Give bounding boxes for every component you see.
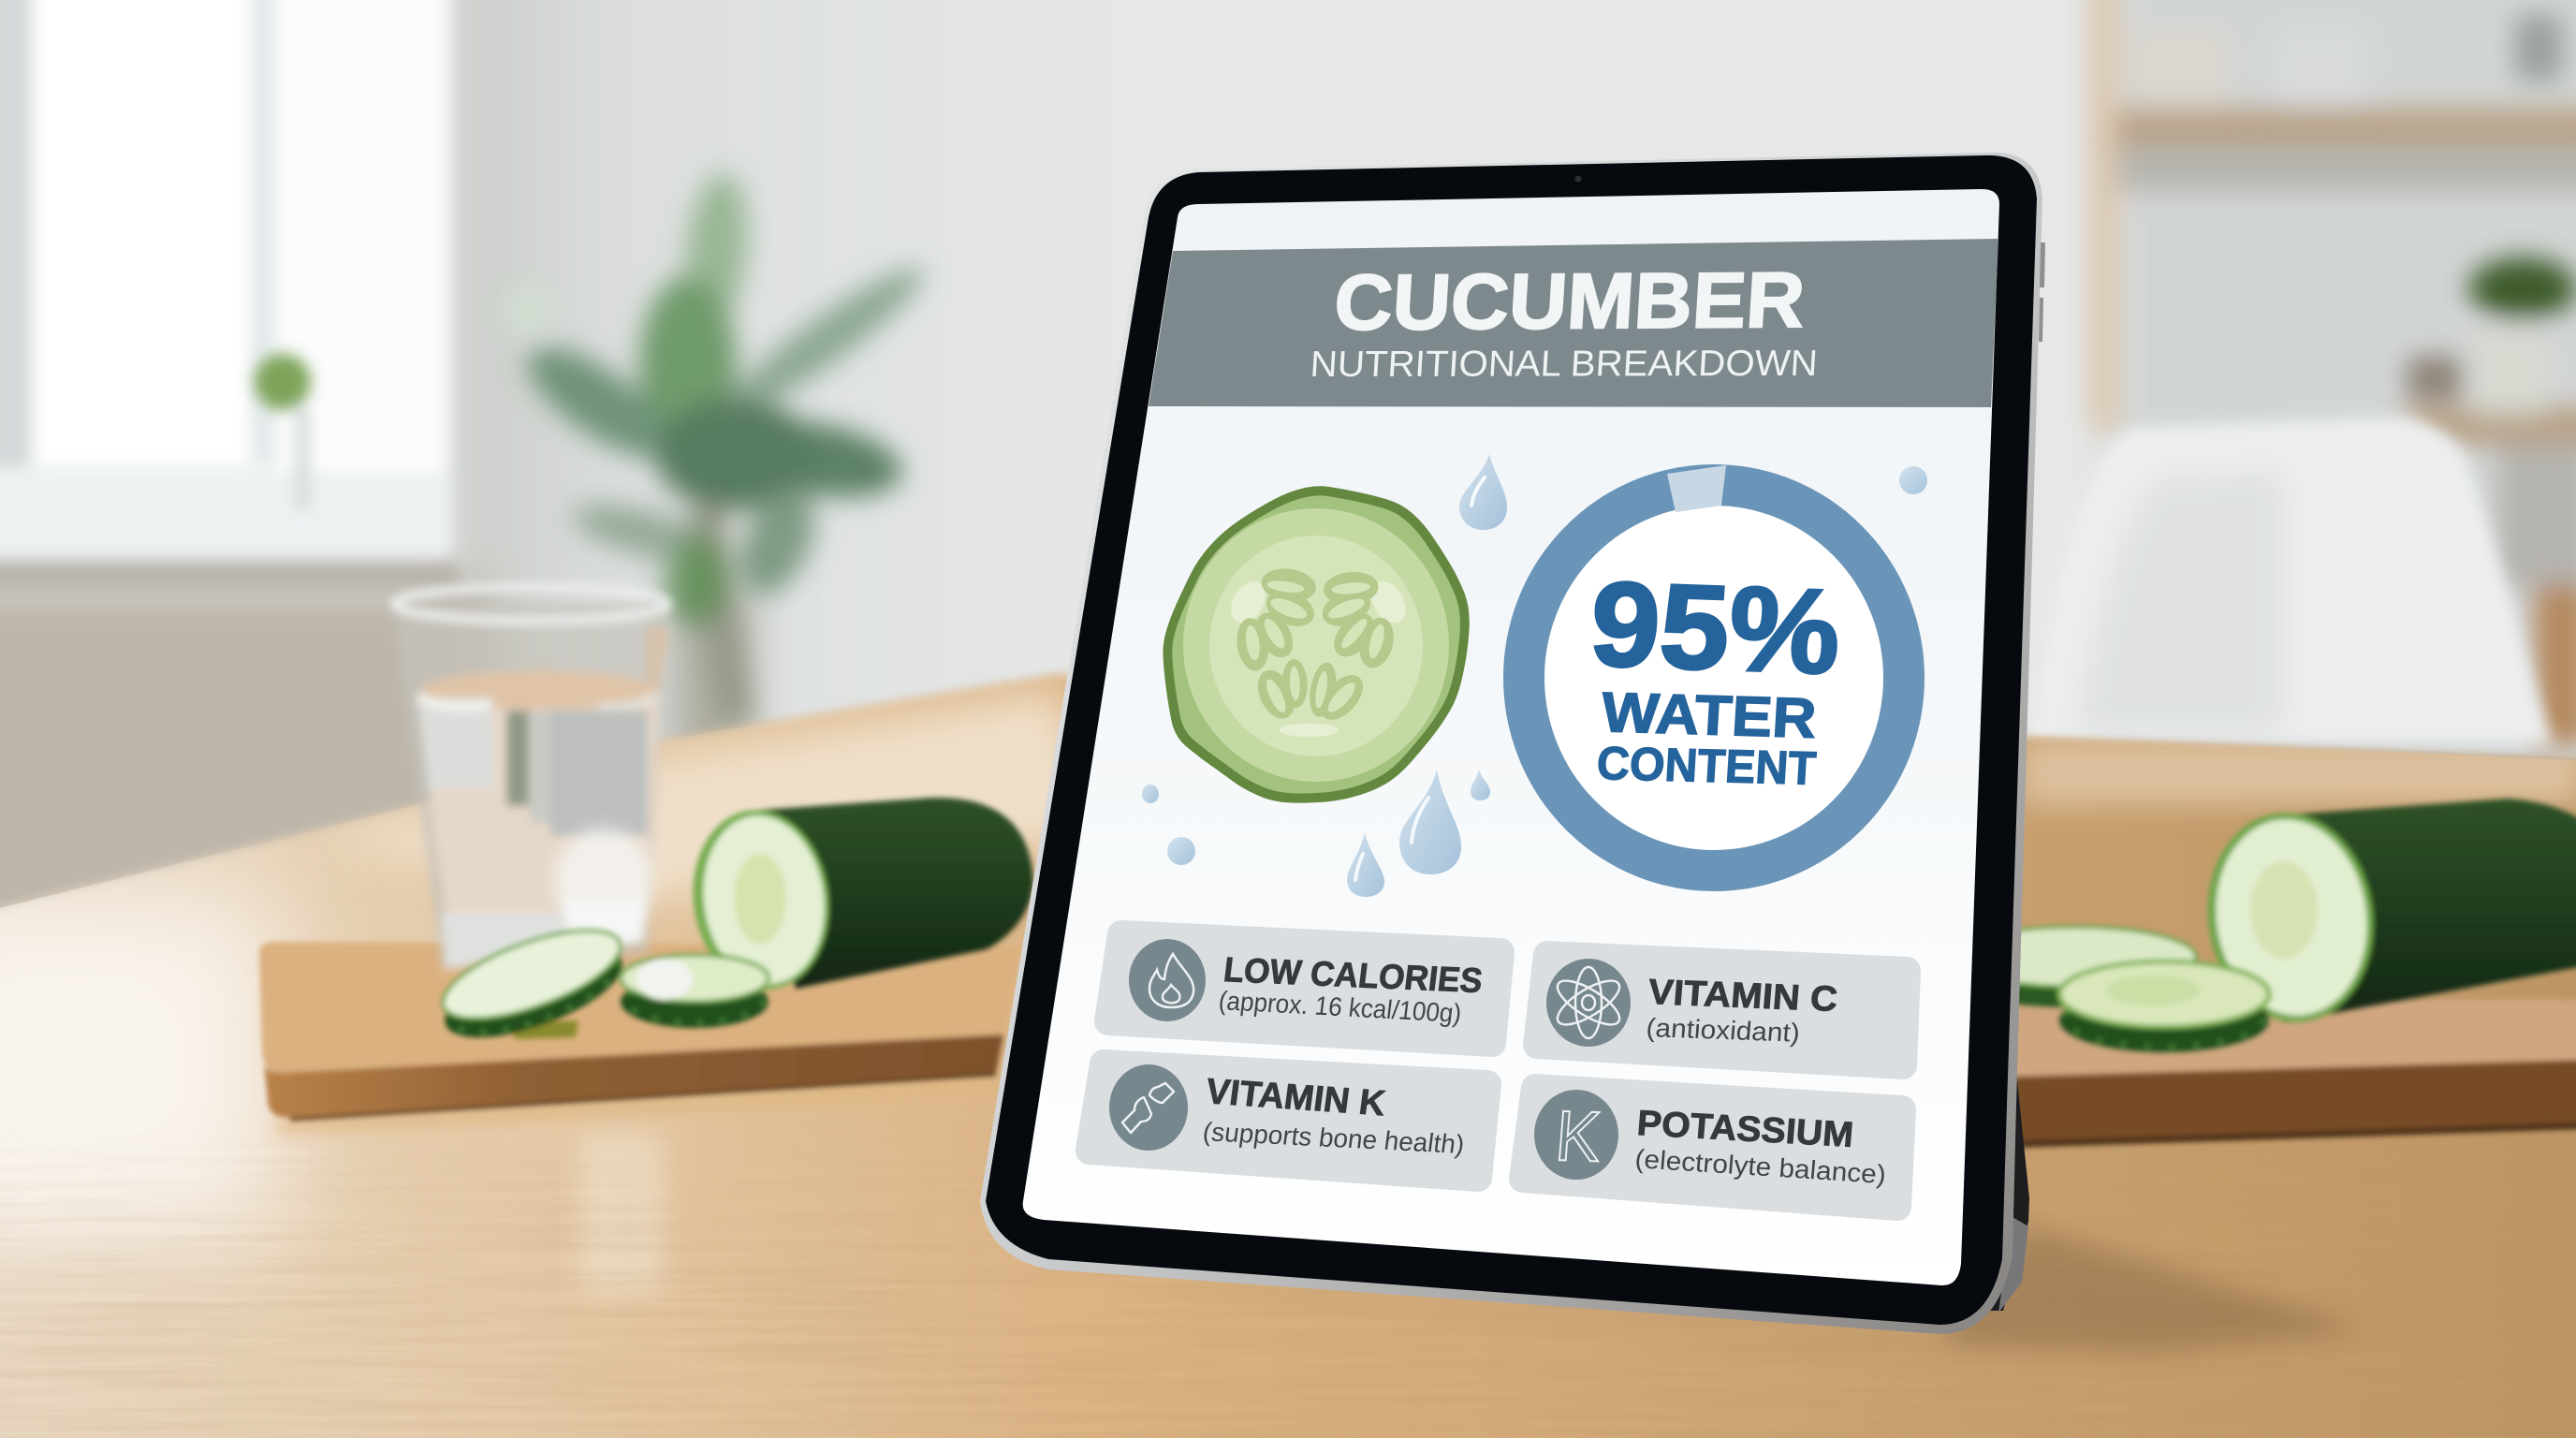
water droplets: [1142, 454, 1927, 897]
title: CUCUMBER: [1332, 256, 1808, 346]
window with sill: [0, 0, 459, 592]
tablet black bezel: [986, 155, 2037, 1325]
blurred potted plant: [505, 170, 935, 721]
cucumber slice illustration: [1163, 486, 1470, 803]
heading: VITAMIN C: [1647, 973, 1839, 1020]
blurred white chair: [2030, 417, 2552, 744]
subtitle: NUTRITIONAL BREAKDOWN: [1309, 344, 1819, 385]
card: vitamin K: [1090, 1064, 1487, 1178]
cutting board: right: [2012, 1000, 2576, 1148]
icon: flame: [1129, 939, 1206, 1021]
background: blurred room wall: [0, 0, 2576, 974]
card: potassium: [1523, 1088, 1902, 1207]
content label: CONTENT: [1595, 737, 1818, 795]
water glass: [393, 587, 670, 970]
tablet stand: [1989, 1034, 2029, 1311]
tablet foot: [1998, 1217, 2028, 1313]
wooden table: [0, 674, 2576, 1438]
icon: bone joint: [1109, 1064, 1188, 1151]
water label: WATER: [1600, 681, 1818, 750]
camera: [1574, 176, 1582, 182]
blurred shelves on right: [2088, 0, 2576, 744]
heading: POTASSIUM: [1635, 1104, 1855, 1155]
icon: potassium K: [1534, 1090, 1618, 1180]
small blurred plant near window: [255, 354, 311, 510]
tablet: [980, 153, 2045, 1334]
95 percent value: 95%: [1587, 557, 1844, 699]
cucumber slices: right: [1953, 927, 2269, 1052]
tablet shadow on table: [1030, 1226, 2368, 1353]
screen: [1023, 189, 1999, 1285]
icon: atom: [1546, 959, 1631, 1047]
5 percent gap segment: [1667, 465, 1726, 512]
detail: (approx. 16 kcal/100g): [1217, 986, 1463, 1028]
detail: (antioxidant): [1646, 1013, 1801, 1048]
header band: [1149, 239, 1998, 407]
water content donut chart: [1524, 465, 1904, 871]
icon: potassium K: K: [1553, 1096, 1603, 1177]
whole cucumber: right: [2194, 799, 2576, 1033]
cutting board: left: [259, 942, 1022, 1133]
detail: (electrolyte balance): [1634, 1144, 1887, 1189]
card: vitamin C: [1537, 955, 1907, 1065]
tablet side buttons: [2039, 242, 2045, 342]
heading: LOW CALORIES: [1222, 949, 1485, 1000]
whole cucumber: left: [681, 798, 1033, 998]
card: low calories: [1108, 934, 1500, 1043]
heading: VITAMIN K: [1204, 1071, 1388, 1123]
tablet metal edge: [980, 153, 2042, 1334]
detail: (supports bone health): [1201, 1117, 1466, 1159]
cucumber slices: left: [432, 913, 768, 1056]
seeds: [1223, 565, 1412, 737]
